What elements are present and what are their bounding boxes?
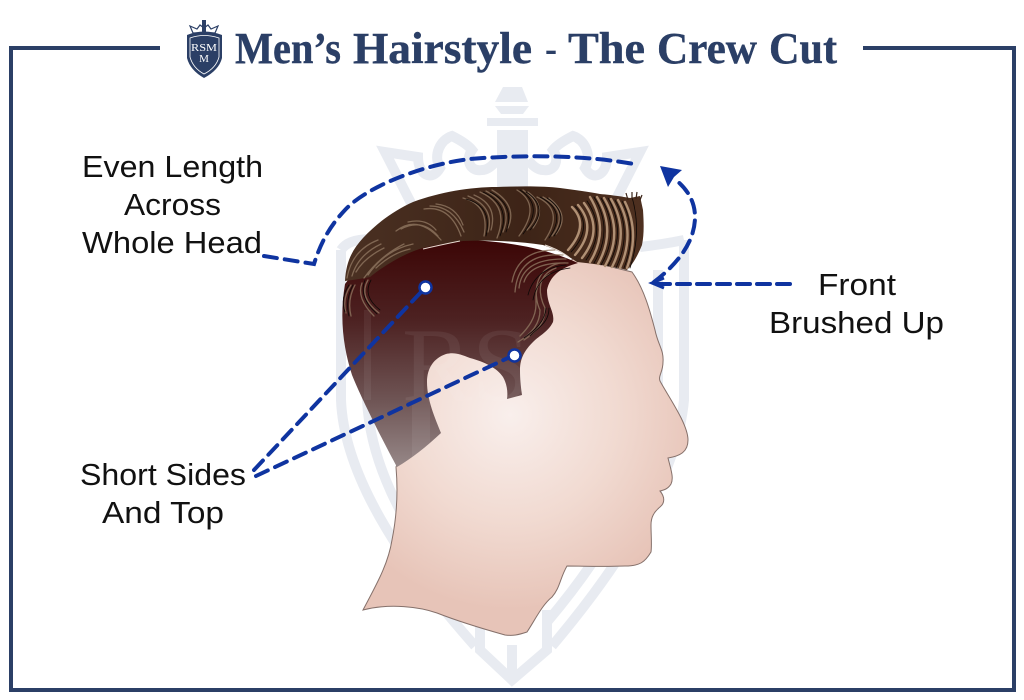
label: even length across whole head [82, 149, 263, 260]
title: Crew [657, 24, 757, 73]
arrow: front brushed up [652, 166, 790, 288]
hair stray tips [626, 192, 642, 200]
faint watermark over side hair: RS [402, 306, 530, 423]
title: Men’s [235, 24, 341, 73]
label: short sides and top [80, 457, 246, 530]
title: Cut [769, 24, 837, 73]
hair strands: dark lines [343, 190, 637, 338]
arrow: short sides pointers [254, 291, 510, 476]
marker: sideburn dot [508, 350, 520, 362]
label: short sides and top: Short Sides [80, 457, 246, 492]
arrow: even length arc [264, 156, 634, 264]
side hair fade [342, 240, 578, 467]
top hair mass [345, 186, 644, 281]
label: front brushed up [769, 267, 944, 340]
hair parting highlight [423, 241, 570, 258]
head silhouette [363, 258, 688, 635]
title: Hairstyle [353, 24, 532, 73]
label: even length across whole head: Across [124, 187, 221, 222]
label: even length across whole head: Whole Head [82, 225, 262, 260]
watermark: crest behind head [341, 87, 684, 680]
label: even length across whole head: Even Length [82, 149, 263, 184]
hair strands: muted highlights [345, 190, 568, 342]
logo crest: M [199, 53, 209, 65]
label: short sides and top: And Top [102, 495, 224, 530]
faint watermark over side hair [364, 306, 530, 460]
label: front brushed up: Brushed Up [769, 305, 944, 340]
hair strands: front tan brush [568, 197, 633, 268]
title: The [568, 24, 645, 73]
title [235, 24, 837, 73]
label: front brushed up: Front [818, 267, 896, 302]
logo crest: RSM [191, 42, 217, 54]
logo crest [187, 20, 222, 78]
marker: upper side dot [420, 282, 432, 294]
title: - [545, 24, 557, 73]
